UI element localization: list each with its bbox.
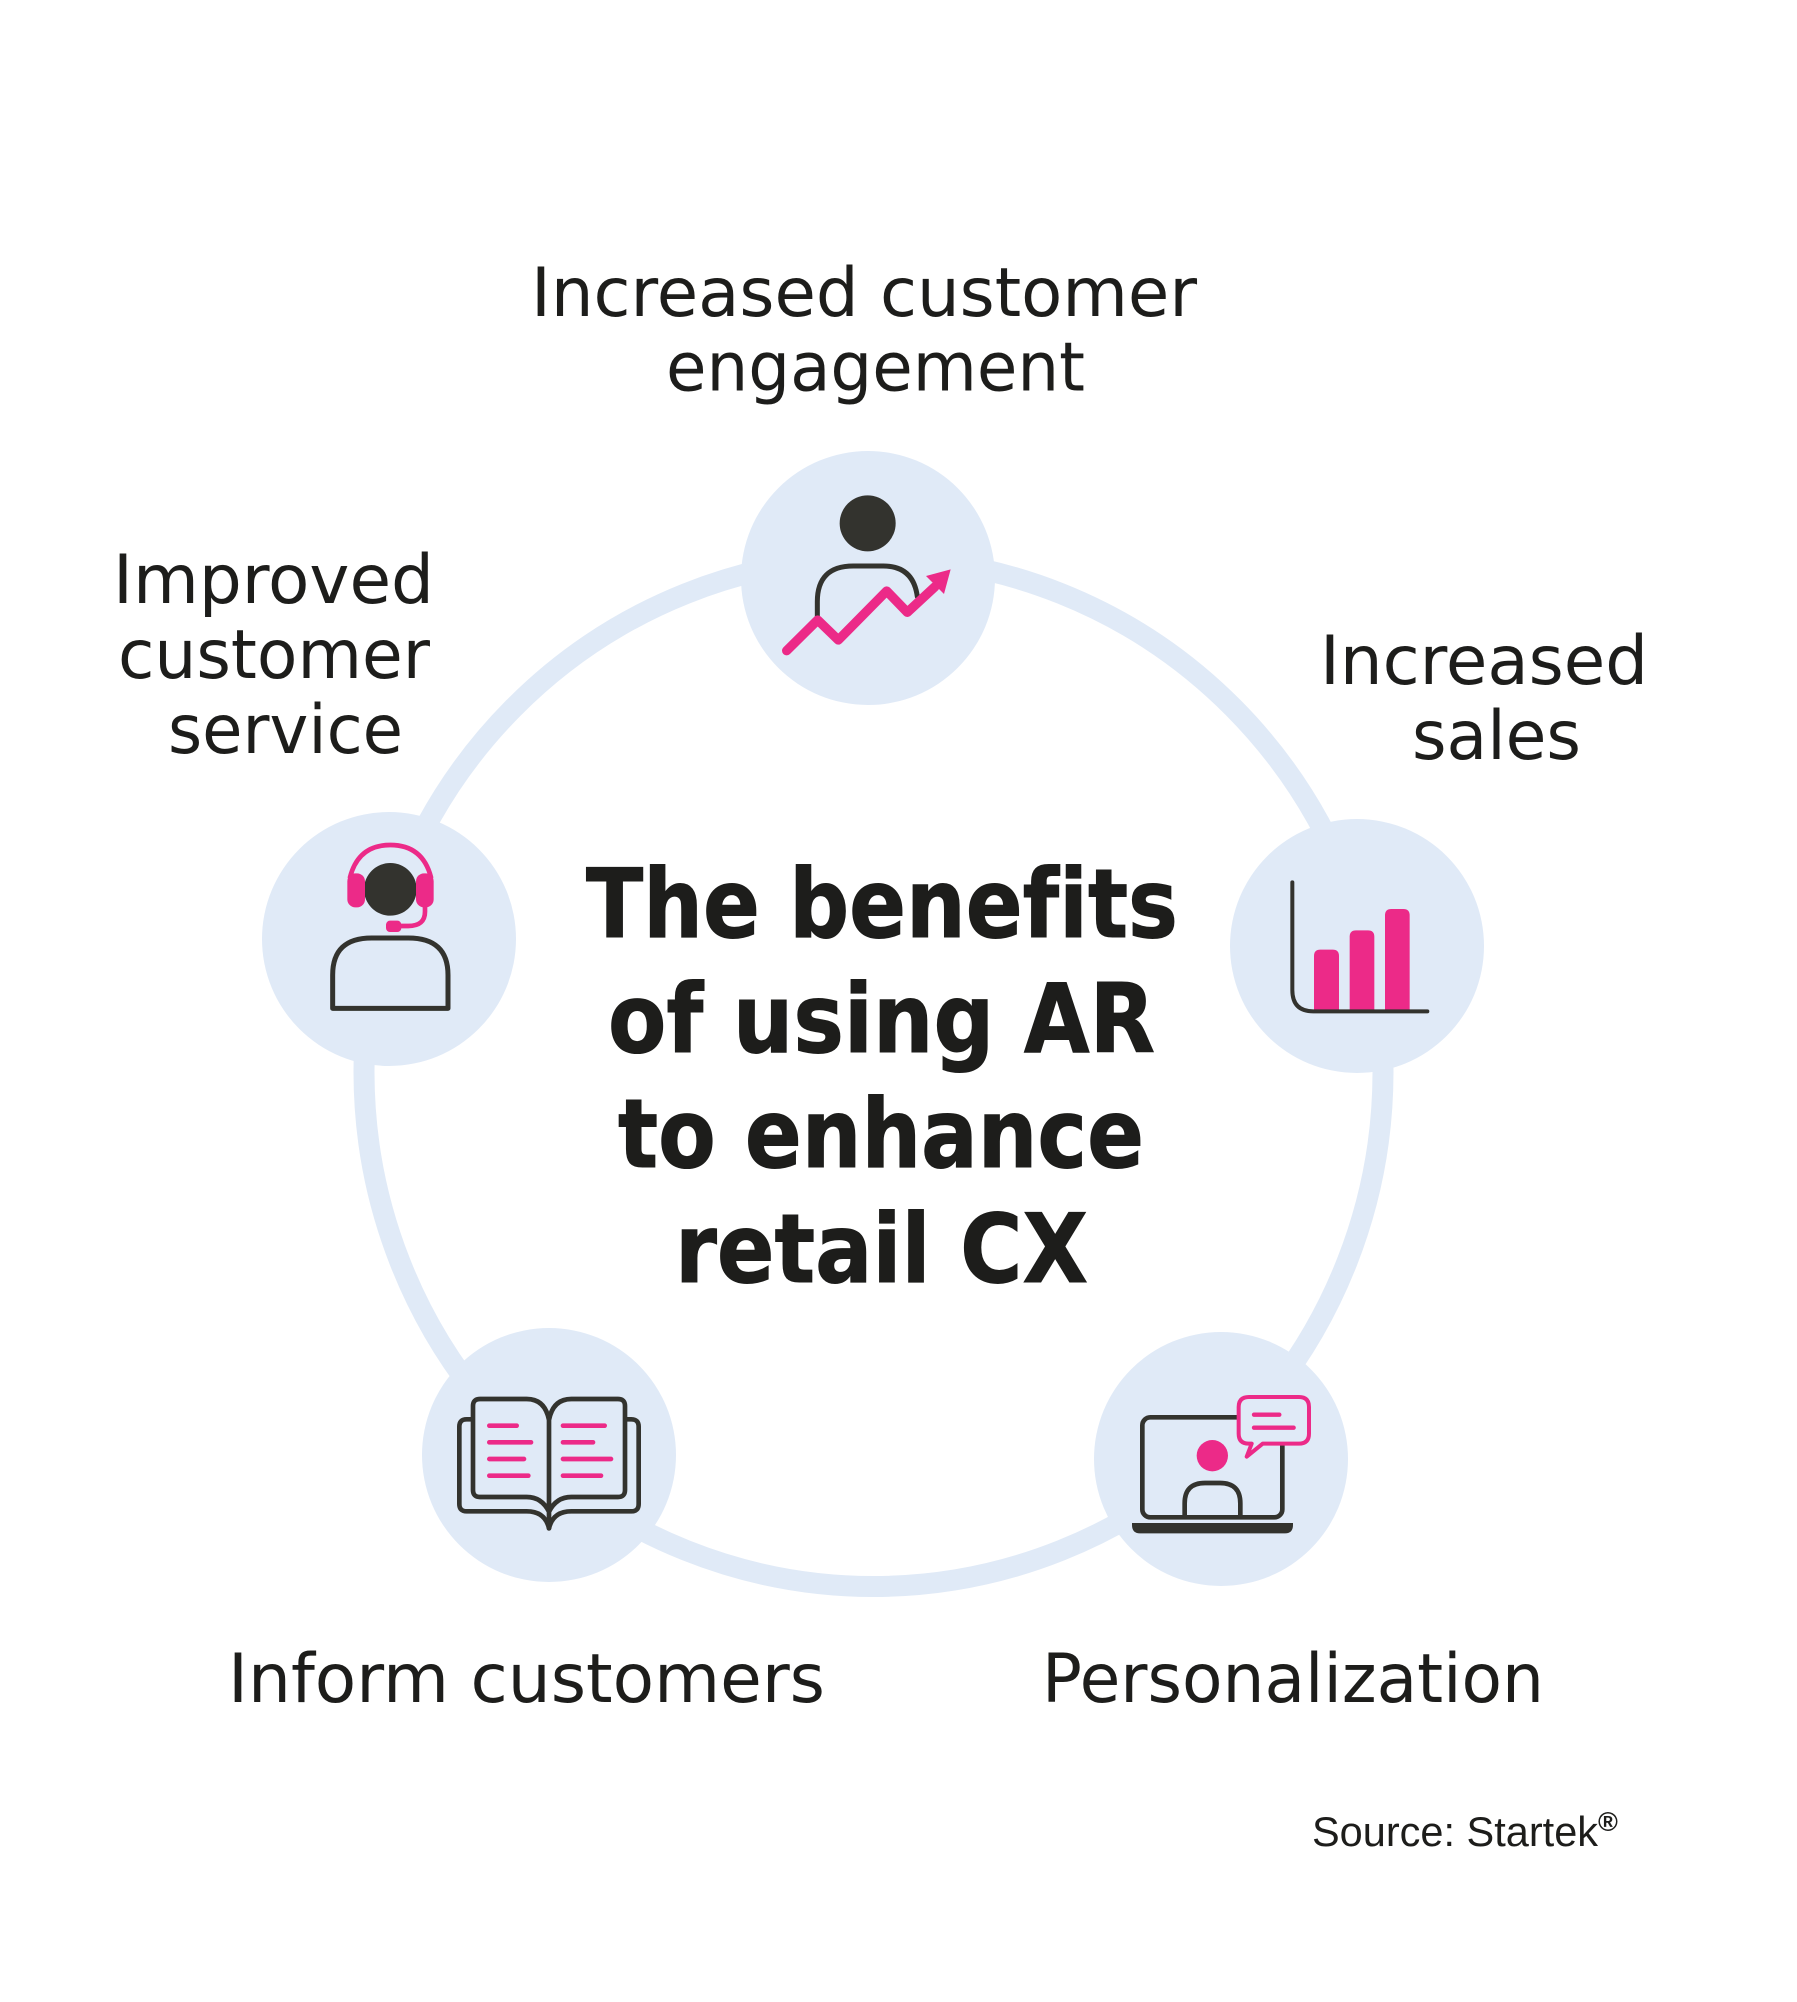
label: increased customer engagement xyxy=(531,254,1197,408)
title: of using AR xyxy=(608,965,1155,1075)
label: increased customer engagement: engagement xyxy=(666,328,1085,408)
label: increased sales xyxy=(1320,622,1648,776)
icon: bar chart xyxy=(1292,882,1427,1011)
label: increased customer engagement: Increased customer xyxy=(531,254,1197,333)
title: retail CX xyxy=(675,1195,1088,1305)
node: personalization xyxy=(1094,1332,1348,1586)
label: personalization: Personalization xyxy=(1042,1640,1544,1719)
connecting ring xyxy=(364,558,1383,1586)
node: increased sales xyxy=(1230,819,1484,1073)
label: improved customer service xyxy=(113,541,434,770)
node: inform customers xyxy=(422,1328,676,1582)
source note: Source: Startek xyxy=(1312,1808,1598,1855)
label: inform customers: Inform customers xyxy=(228,1640,825,1719)
icon: laptop video chat xyxy=(1132,1397,1309,1533)
icon: agent with headset xyxy=(333,845,448,1008)
label: improved customer service: service xyxy=(168,691,403,770)
node: improved customer service xyxy=(262,812,516,1066)
icon: person with rising arrow xyxy=(787,495,951,651)
source note: ® xyxy=(1598,1807,1618,1837)
title xyxy=(586,850,1178,1305)
node: increased customer engagement xyxy=(741,451,995,705)
title: The benefits xyxy=(586,850,1178,960)
label: increased sales: Increased xyxy=(1320,622,1648,701)
label: increased sales: sales xyxy=(1412,697,1581,776)
title: to enhance xyxy=(618,1080,1144,1190)
icon: open book xyxy=(459,1399,639,1528)
label: improved customer service: Improved xyxy=(113,541,434,620)
label: improved customer service: customer xyxy=(118,616,430,695)
